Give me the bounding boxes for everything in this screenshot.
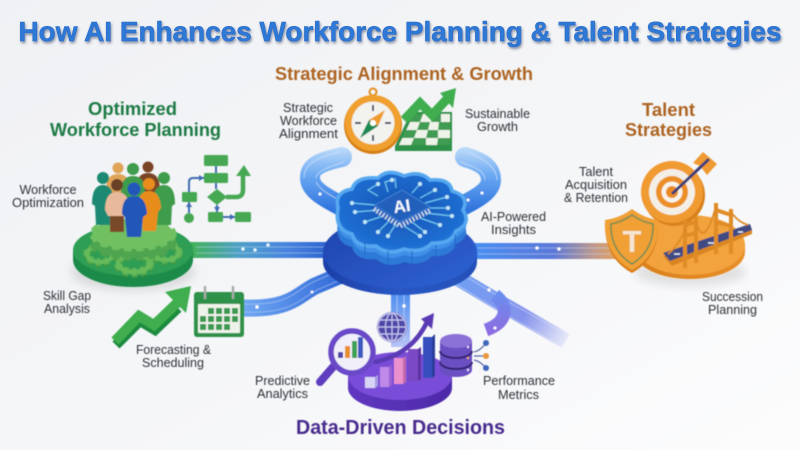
pipe: upper right to strategic alignment	[460, 152, 497, 206]
icon: compass	[344, 88, 402, 154]
pipe: AI hub to talent strategies	[472, 243, 616, 259]
heading: optimized workforce planning	[50, 98, 221, 140]
label: workforce optimization	[12, 182, 84, 210]
label: sustainable growth: Sustainable	[465, 106, 530, 121]
pipe: upper left to strategic alignment	[304, 152, 346, 208]
label: performance metrics: Performance	[483, 373, 555, 388]
heading: data-driven decisions: Data-Driven Decisions	[296, 417, 505, 439]
AI chip: AI	[392, 196, 412, 217]
label: succession planning: Succession	[702, 289, 763, 304]
icon: calendar	[194, 287, 244, 337]
icon: data nodes	[474, 340, 489, 371]
heading: talent strategies	[625, 99, 712, 140]
people group	[92, 162, 175, 237]
panel: optimized workforce planning	[12, 98, 251, 370]
label: forecasting and scheduling: Forecasting &	[136, 342, 211, 357]
label: performance metrics	[483, 373, 555, 402]
brain base	[337, 172, 466, 265]
label: workforce optimization: Workforce	[20, 182, 76, 197]
pipe: forecasting calendar to AI hub	[240, 268, 349, 312]
circuit traces	[350, 178, 454, 238]
label: succession planning	[702, 289, 763, 317]
icon: globe	[377, 312, 407, 342]
green platform	[71, 224, 195, 290]
panel: AI hub	[323, 172, 546, 295]
connector pipes	[190, 152, 616, 347]
orange platform	[634, 215, 746, 286]
heading: talent strategies: Strategies	[625, 119, 712, 140]
label: skill gap analysis	[43, 288, 91, 316]
label: talent acquisition and retention: Talent	[579, 164, 613, 179]
label: predictive analytics: Predictive	[255, 373, 310, 388]
pipe: purple branch to performance metrics	[486, 295, 504, 330]
heading: optimized workforce planning: Workforce Planning	[50, 119, 221, 140]
icon: green trend arrow	[115, 286, 191, 345]
label: forecasting and scheduling	[136, 342, 211, 370]
label: AI-powered insights	[481, 209, 546, 237]
pipe: workforce planning to AI hub	[190, 242, 330, 258]
title: How AI Enhances Workforce Planning & Talent Strategies	[18, 16, 782, 47]
pipe: AI hub down to data decisions	[391, 285, 410, 347]
label: predictive analytics	[255, 373, 310, 401]
label: workforce optimization: Optimization	[12, 195, 84, 210]
AI chip	[374, 190, 431, 226]
bar chart	[365, 334, 435, 388]
label: skill gap analysis: Analysis	[44, 301, 90, 316]
panel: strategic alignment and growth	[275, 64, 533, 154]
heading: strategic alignment and growth: Strategic Alignment & Growth	[275, 64, 533, 84]
trend arrow	[375, 313, 434, 362]
label: sustainable growth: Growth	[477, 119, 518, 134]
pipe: lower right fading stream	[454, 273, 570, 346]
purple platform	[348, 352, 452, 411]
blue platform	[323, 216, 477, 295]
icon: growth chessboard	[395, 88, 456, 151]
label: AI-powered insights: AI-Powered	[481, 209, 546, 224]
label: strategic workforce alignment: Workforce	[280, 113, 337, 128]
icon: shield	[605, 209, 658, 273]
icon: bridge	[663, 203, 752, 268]
flowchart icon	[182, 155, 251, 223]
gears	[87, 219, 179, 274]
label: strategic workforce alignment	[279, 100, 338, 141]
label: sustainable growth	[465, 106, 530, 134]
label: strategic workforce alignment: Strategic	[283, 100, 333, 115]
icon: shield: T	[623, 224, 642, 259]
label: talent acquisition and retention: Acquisition	[565, 177, 627, 192]
heading: optimized workforce planning: Optimized	[88, 98, 177, 119]
label: strategic workforce alignment: Alignment	[279, 126, 338, 141]
label: forecasting and scheduling: Scheduling	[142, 355, 204, 370]
icon: database	[440, 334, 472, 377]
panel: talent strategies	[564, 99, 763, 317]
label: skill gap analysis: Skill Gap	[43, 288, 91, 303]
panel: data-driven decisions	[255, 312, 555, 439]
heading: talent strategies: Talent	[642, 99, 695, 120]
label: succession planning: Planning	[708, 302, 757, 317]
label: AI-powered insights: Insights	[491, 222, 536, 237]
icon: target	[641, 152, 717, 226]
label: predictive analytics: Analytics	[257, 386, 308, 401]
icon: magnifier	[320, 331, 373, 382]
label: talent acquisition and retention	[564, 164, 628, 205]
label: talent acquisition and retention: & Retention	[564, 190, 628, 205]
label: performance metrics: Metrics	[498, 387, 539, 402]
